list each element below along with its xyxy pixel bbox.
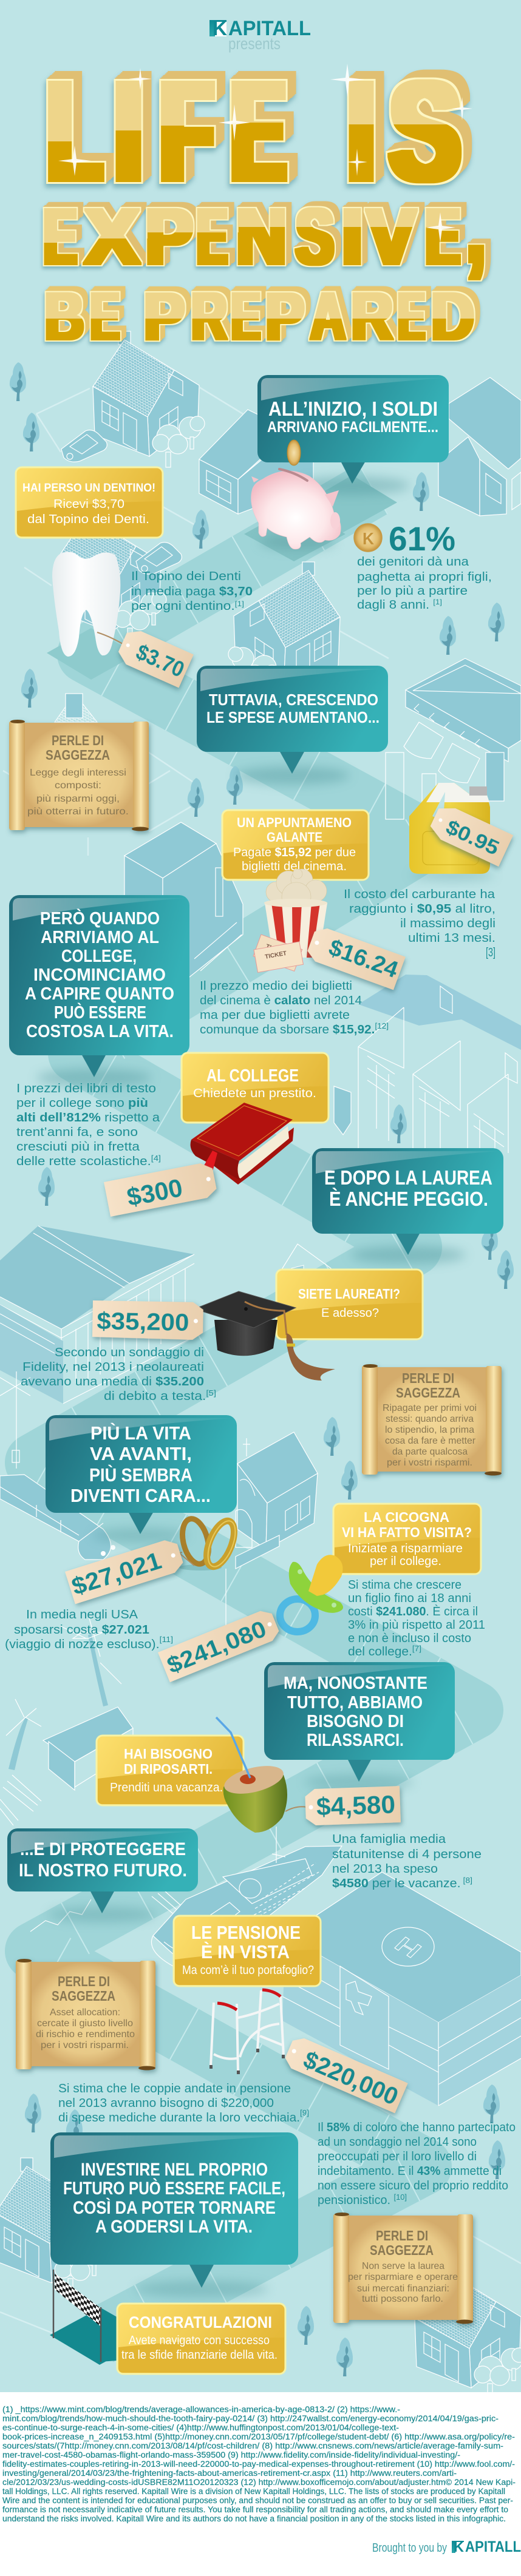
student debt text: [21, 1346, 216, 1403]
scroll 3: perle di saggezza: Asset allocation:: [50, 2007, 120, 2018]
bubble 4: dopo la laurea: [312, 1148, 503, 1264]
scroll 4: perle di saggezza: tutti possono farlo.: [362, 2294, 443, 2304]
bubble 3: college: INCOMINCIAMO: [33, 965, 166, 985]
textbooks text: [4]: [151, 1154, 161, 1163]
price tag: $16.24: [305, 925, 406, 990]
scroll 4: perle di saggezza: [333, 2213, 473, 2324]
child cost text: Si stima che crescere: [348, 1578, 461, 1592]
price tag: $35,200: [92, 1300, 203, 1340]
stat: 61% allowance: [1]: [433, 598, 442, 606]
scroll 4: perle di saggezza: sui mercati finanziari:: [357, 2284, 449, 2294]
title: be prepared: P: [265, 279, 304, 354]
price tag: $16.24: $16.24: [325, 935, 401, 983]
footnotes and legal text: cle/2012/03/23/us-wedding-costs-idUSBRE82M11O20120323 (12) http://www.boxofficemojo.com/about/adjuster.htm© 2014 New Kapi-: [2, 2478, 516, 2487]
stat: 61% allowance: [354, 519, 492, 612]
yellow box: al college: AL COLLEGE: [206, 1066, 299, 1086]
scroll 4: perle di saggezza: per risparmiare e operare: [348, 2272, 458, 2282]
houses by the finish line: [0, 2158, 521, 2399]
bubble 1: all'inizio: ALL’INIZIO, I SOLDI: [268, 397, 438, 420]
medical expense text: nel 2013 avranno bisogno di $220,000: [58, 2097, 274, 2110]
bubble 5: più la vita va avanti: PIÙ SEMBRA: [89, 1464, 192, 1486]
title: expensive: ,: [466, 164, 486, 286]
survey text: Il 58% di coloro che hanno partecipato: [318, 2121, 516, 2134]
house and fence behind the tooth box: [24, 507, 200, 643]
scroll 4: perle di saggezza: PERLE DI: [376, 2228, 428, 2243]
yellow box: hai perso un dentino: [16, 467, 163, 538]
yellow box: la cicogna: LA CICOGNA: [364, 1509, 449, 1525]
price tag: $4,580: $4,580: [316, 1790, 396, 1821]
footnotes and legal text: (1) _https://www.mint.com/blog/trends/average-allowances-in-america-by-age-0813-2/ (2) https://www.-: [2, 2405, 400, 2414]
scroll 1: perle di saggezza: composti:: [55, 780, 101, 791]
tooth fairy text: per ogni dentino.: [131, 600, 222, 613]
footnotes and legal text: fidelity-estimates-couples-retiring-in-2013-will-need-220000-to-pay-medical-expenses-throughout-retirement (10) http://www.fool.com/-: [2, 2459, 515, 2469]
student debt text: di debito a testa.: [104, 1390, 193, 1403]
yellow box: siete laureati: E adesso?: [321, 1307, 379, 1320]
icon: wedding rings: [167, 1516, 241, 1570]
icon: tooth: [52, 552, 129, 657]
title sparkles: [58, 64, 472, 243]
bubble 5: più la vita va avanti: [46, 1415, 237, 1543]
icon: coconut with straw: [216, 1717, 307, 1833]
cinema text: ma per due biglietti avrete: [200, 1009, 350, 1022]
yellow box: appuntamento: GALANTE: [267, 830, 322, 845]
title: Life is: L: [47, 52, 101, 211]
bubble 3: college: [9, 895, 189, 1087]
tooth fairy text: [131, 570, 253, 613]
title: be prepared: R: [191, 279, 227, 354]
title: expensive: V: [367, 192, 415, 281]
title: be prepared: E: [398, 279, 425, 354]
student debt text: Fidelity, nel 2013 i neolaureati: [22, 1361, 204, 1374]
scroll 1: perle di saggezza: [9, 720, 149, 831]
scroll 2: perle di saggezza: per i vostri risparmi.: [387, 1458, 472, 1468]
brought to you by credit with logo: [372, 2538, 521, 2555]
wedding text: (viaggio di nozze escluso).: [5, 1638, 148, 1651]
house under the dentist text: [228, 562, 389, 698]
textbooks text: [16, 1082, 161, 1168]
price tag: $27,021: [65, 1537, 185, 1604]
price tag: $241,080: [158, 1607, 281, 1682]
brought to you by credit with logo: K: [454, 2539, 465, 2555]
yellow box: la cicogna: [333, 1504, 481, 1574]
bubble 3: college: PUÒ ESSERE: [54, 1002, 146, 1023]
child cost text: e non è incluso il costo: [348, 1632, 471, 1645]
icon: jerry can: [409, 783, 495, 880]
footnotes and legal text: [2, 2405, 516, 2523]
bubble 1: all'inizio: ARRIVANO FACILMENTE...: [267, 419, 438, 436]
title: expensive: [44, 164, 486, 286]
finish line flag and tile: [50, 2270, 152, 2365]
long house left of the first bubble: [199, 410, 313, 514]
yellow box: appuntamento: UN APPUNTAMENO: [237, 815, 352, 830]
yellow box: appuntamento: Pagate $15,92 per due: [233, 846, 356, 859]
textbooks text: alti dell’812% rispetto a: [16, 1111, 160, 1124]
bubble 5: più la vita va avanti: VA AVANTI,: [90, 1443, 192, 1464]
yellow box: le pensione: È IN VISTA: [201, 1941, 290, 1962]
title: Life is: F: [161, 52, 213, 211]
yellow box: hai bisogno di riposarti: Prenditi una vacanza.: [110, 1781, 223, 1794]
price tag: $4,580: [305, 1786, 401, 1826]
textbooks text: cresciuti più in fretta: [16, 1140, 140, 1154]
bubble 3: college: PERÒ QUANDO: [40, 908, 160, 928]
stat: 61% allowance: dei genitori dà una: [357, 555, 469, 569]
survey text: [318, 2121, 516, 2207]
scroll 4: perle di saggezza: Non serve la laurea: [362, 2261, 444, 2271]
bubble 8: investire: COSÌ DA POTER TORNARE: [73, 2197, 276, 2218]
child cost text: del college.: [348, 1645, 409, 1658]
footnotes and legal text: mint.com/blog/trends/how-much-should-the-tooth-fairy-pay-0214/ (3) http://247wallst.com/energy-economy/2014/04/19/gas-pric-: [2, 2414, 499, 2423]
medical expense text: Si stima che le coppie andate in pensione: [58, 2082, 291, 2095]
vacation text: [8]: [461, 1876, 472, 1885]
footnotes and legal text: tall Holdings, LLC. All rights reserved. Kapitall Wire is a division of New Kapitall Holdings, LLC. The lists of stocks are produced by Kapitall: [2, 2487, 505, 2496]
bubble 5: più la vita va avanti: PIÙ LA VITA: [90, 1422, 191, 1444]
bubble 1: all'inizio: [257, 375, 449, 495]
icon: pacifier: [280, 1555, 343, 1632]
bubble 2: tuttavia: TUTTAVIA, CRESCENDO: [209, 691, 378, 709]
title: be prepared: R: [351, 279, 393, 354]
cinema building: [118, 822, 243, 977]
yellow box: congratulazioni: CONGRATULAZIONI: [129, 2313, 272, 2331]
yellow box: le pensione: [174, 1916, 321, 1986]
survey text: indebitamento. E il 43% ammette di: [318, 2165, 502, 2178]
footnotes and legal text: formance is not necessarily indicative of future results. You take full responsibility for all trading actions, and should make every effort to: [2, 2505, 508, 2514]
scroll 2: perle di saggezza: [362, 1364, 502, 1476]
footnotes and legal text: Wire and the content is intended for educational purposes only, and should not be construed as an offer to buy or sell securities. Past per-: [2, 2496, 513, 2505]
wedding text: [11]: [160, 1635, 173, 1644]
presents label: presents: [228, 35, 281, 53]
stat: 61% allowance: dagli 8 anni.: [357, 598, 423, 612]
survey text: non essere sicuro del proprio reddito: [318, 2179, 508, 2192]
scroll 3: perle di saggezza: di rischio e rendimento: [36, 2029, 135, 2040]
long house right of the first bubble: [438, 377, 521, 516]
price tag: $3.70: $3.70: [132, 639, 188, 682]
scroll 1: perle di saggezza: più otterrai in futuro.: [27, 806, 129, 817]
palm trees and beach hut: [0, 1614, 194, 1932]
wedding text: In media negli USA: [26, 1608, 138, 1621]
title: be prepared: D: [431, 279, 474, 354]
scroll 3: perle di saggezza: [16, 1959, 155, 2071]
house: top left: [36, 331, 243, 467]
scroll 2: perle di saggezza: PERLE DI: [402, 1370, 454, 1386]
yellow box: al college: Chiedete un prestito.: [193, 1087, 316, 1100]
tooth fairy text: Il Topino dei Denti: [131, 570, 241, 583]
price tag: $0.95: $0.95: [443, 816, 503, 859]
footnotes and legal text: investing/general/2014/03/23/the-frightening-facts-about-americas-retirement-cr.aspx (11) http://www.reuters.com/arti-: [2, 2469, 457, 2478]
medical expense text: [58, 2082, 309, 2125]
cinema text: del cinema è calato nel 2014: [200, 994, 362, 1007]
title: expensive: X: [85, 192, 140, 281]
title: expensive: N: [236, 192, 287, 281]
medical expense text: [9]: [300, 2108, 309, 2117]
stat: 61% allowance: per lo più a partire: [357, 584, 468, 598]
church: [226, 1432, 318, 1651]
bubble 5: più la vita va avanti: DIVENTI CARA...: [70, 1485, 211, 1506]
scroll 3: perle di saggezza: per i vostri risparmi.: [41, 2040, 129, 2050]
brought to you by credit with logo: Brought to you by: [372, 2541, 447, 2555]
title: Life is: I: [114, 52, 143, 211]
title: expensive: E: [197, 192, 227, 281]
icon: red book: [191, 1103, 294, 1185]
isometric road winding down the page: [34, 475, 474, 2336]
stat: 61% allowance: K: [363, 529, 374, 548]
bubble 4: dopo la laurea: E DOPO LA LAUREA: [324, 1166, 492, 1189]
icon: popcorn bucket and tickets: TICKET: [264, 950, 287, 961]
price tag: $220,000: [282, 2035, 408, 2113]
title: Life is: E: [231, 52, 285, 211]
survey text: ad un sondaggio nel 2014 sono: [318, 2135, 477, 2149]
fence and roof around first scroll: [3, 694, 200, 856]
footnotes and legal text: understand the risks involved. Kapitall Wire and its authors do not have a financial position in any of the stocks listed in this infographic.: [2, 2514, 506, 2523]
gas station: [386, 658, 521, 825]
scroll 3: perle di saggezza: cercate il giusto livello: [37, 2018, 133, 2029]
yellow box: hai perso un dentino: Ricevi $3,70: [53, 498, 124, 511]
tooth fairy text: [1]: [235, 600, 244, 608]
bubble 2: tuttavia: LE SPESE AUMENTANO...: [206, 708, 380, 726]
scroll 2: perle di saggezza: stessi: quando arriva: [386, 1414, 474, 1424]
textbooks text: per il college sono più: [16, 1097, 148, 1110]
trees: [10, 362, 514, 2376]
child cost text: 3% in più rispetto al 2011: [348, 1618, 485, 1632]
title: expensive: P: [146, 192, 193, 281]
yellow box: al college: [182, 1053, 329, 1123]
scroll 2: perle di saggezza: SAGGEZZA: [396, 1385, 460, 1401]
title: Life is: I: [348, 52, 375, 211]
bank building with columns: [0, 1226, 197, 1469]
stat: 61% allowance: paghetta ai propri figli,: [357, 570, 492, 584]
yellow box: la cicogna: VI HA FATTO VISITA?: [342, 1524, 472, 1540]
yellow box: appuntamento: biglietti del cinema.: [242, 860, 347, 873]
vacation text: Una famiglia media: [332, 1833, 446, 1846]
bubble 3: college: COSTOSA LA VITA.: [26, 1022, 174, 1041]
scroll 1: perle di saggezza: Legge degli interessi: [30, 768, 126, 778]
scroll 1: perle di saggezza: più risparmi oggi,: [36, 794, 120, 804]
title: expensive: I: [341, 192, 363, 281]
vacation text: statunitense di 4 persone: [332, 1848, 482, 1861]
title: be prepared: [45, 279, 474, 354]
scroll 2: perle di saggezza: cosa da fare è metter: [385, 1436, 476, 1446]
bubble 7: proteggere il futuro: IL NOSTRO FUTURO.: [19, 1861, 187, 1881]
title: Life is: S: [390, 52, 460, 211]
yellow box: congratulazioni: tra le sfide finanziarie della vita.: [121, 2348, 278, 2362]
yellow box: siete laureati: SIETE LAUREATI?: [298, 1286, 400, 1302]
gas cost text: ultimi 13 mesi.: [408, 931, 495, 945]
wedding text: [5, 1608, 173, 1651]
bubble 8: investire: INVESTIRE NEL PROPRIO: [81, 2160, 268, 2180]
limousine: [0, 1475, 115, 1560]
price tag: $27,021: $27,021: [69, 1547, 165, 1600]
price tag: $0.95: [427, 802, 513, 867]
title: expensive: E: [426, 192, 460, 281]
footer white area: [0, 2392, 521, 2576]
bubble 8: investire: FUTURO PUÒ ESSERE FACILE,: [63, 2178, 285, 2199]
stat: 61% allowance: 61%: [389, 519, 455, 558]
textbooks text: trent’anni fa, e sono: [16, 1126, 138, 1139]
bubble 2: tuttavia: [197, 666, 388, 785]
icon: popcorn bucket and tickets: TICKET: [265, 943, 288, 957]
bubble 3: college: A CAPIRE QUANTO: [25, 984, 174, 1004]
yellow box: congratulazioni: [117, 2304, 285, 2374]
bubble 6: rilassarci: MA, NONOSTANTE: [284, 1674, 427, 1693]
bubble 6: rilassarci: TUTTO, ABBIAMO: [287, 1693, 423, 1712]
survey text: [10]: [394, 2192, 407, 2202]
scroll 2: perle di saggezza: da parte qualcosa: [392, 1447, 468, 1457]
survey text: preoccupati per il loro livello di: [318, 2150, 477, 2163]
logo: Kapitall: K: [213, 17, 227, 39]
price tag: $300: $300: [124, 1173, 185, 1212]
vacation text: $4580 per le vacanze.: [332, 1877, 454, 1890]
price tag: $35,200: $35,200: [97, 1308, 189, 1336]
child cost text: un figlio fino ai 18 anni: [348, 1592, 471, 1605]
vacation text: nel 2013 ha speso: [332, 1862, 438, 1876]
textbooks text: delle rette scolastiche.: [16, 1155, 137, 1168]
gas cost text: raggiunto i $0,95 al litro,: [349, 902, 495, 916]
vacation text: [332, 1833, 482, 1890]
title: expensive: E: [44, 192, 77, 281]
small building behind the last bubble: [281, 1244, 331, 1305]
medical expense text: di spese mediche durante la loro vecchiaia.: [58, 2111, 291, 2125]
gas cost text: [3]: [486, 946, 495, 959]
title: Life is: [47, 52, 460, 211]
price tag: $220,000: $220,000: [299, 2046, 402, 2111]
gas cost text: Il costo del carburante ha: [344, 888, 495, 901]
bubble 6: rilassarci: [264, 1662, 455, 1790]
yellow box: hai bisogno di riposarti: [97, 1736, 243, 1805]
title: be prepared: E: [231, 279, 260, 354]
cinema text: Il prezzo medio dei biglietti: [200, 979, 352, 993]
yellow box: siete laureati: [276, 1269, 423, 1339]
scroll 2: perle di saggezza: lo stipendio, la prima: [385, 1425, 474, 1435]
wedding text: sposarsi costa $27.021: [14, 1623, 149, 1637]
bubble 3: college: ARRIVIAMO AL: [41, 928, 159, 947]
scroll 3: perle di saggezza: PERLE DI: [58, 1973, 110, 1989]
child cost text: [7]: [412, 1644, 421, 1653]
bubble 7: proteggere il futuro: [7, 1828, 198, 1922]
yellow box: hai perso un dentino: HAI PERSO UN DENTINO!: [22, 482, 155, 495]
cinema text: comunque da sborsare $15,92.: [200, 1023, 373, 1036]
piggy bank with coin: [251, 440, 341, 549]
student debt text: [5]: [206, 1388, 216, 1398]
bubble 3: college: COLLEGE,: [61, 947, 137, 966]
yellow box: le pensione: Ma com’è il tuo portafoglio?: [182, 1964, 314, 1977]
yellow box: congratulazioni: Avete navigato con successo: [129, 2334, 270, 2347]
title: be prepared: A: [310, 279, 346, 354]
yellow box: hai bisogno di riposarti: DI RIPOSARTI.: [124, 1761, 213, 1777]
cruise ship: [151, 1827, 342, 1969]
cinema text: [200, 979, 389, 1036]
bubble 8: investire: A GODERSI LA VITA.: [95, 2217, 253, 2237]
scroll 1: perle di saggezza: SAGGEZZA: [46, 747, 110, 763]
yellow box: la cicogna: per il college.: [370, 1555, 441, 1568]
logo: Kapitall: APITALL: [228, 17, 311, 40]
price tag: $241,080: $241,080: [163, 1616, 270, 1679]
price tag: $300: [104, 1161, 218, 1217]
gas cost text: [344, 888, 495, 959]
textbooks text: I prezzi dei libri di testo: [16, 1082, 156, 1095]
bubble 8: investire: [50, 2132, 298, 2297]
icon: graduation cap: [194, 1291, 335, 1381]
icon: popcorn bucket and tickets: [253, 869, 327, 972]
scroll 3: perle di saggezza: SAGGEZZA: [52, 1988, 115, 2004]
footnotes and legal text: sources/stats/(7http://money.cnn.com/2013/08/14/pf/cost-children/ (8) http://www.cnsnews.com/news/article/average-family-sum-: [2, 2441, 503, 2450]
yellow box: hai bisogno di riposarti: HAI BISOGNO: [124, 1746, 213, 1762]
tooth fairy text: in media paga $3,70: [131, 585, 253, 598]
yellow box: le pensione: LE PENSIONE: [191, 1922, 301, 1943]
college campus: [334, 975, 521, 1153]
title: be prepared: E: [90, 279, 120, 354]
icon: walker: [209, 1990, 285, 2074]
yellow box: hai perso un dentino: dal Topino dei Denti.: [27, 513, 149, 526]
student debt text: Secondo un sondaggio di: [55, 1346, 204, 1359]
student debt text: avevano una media di $35.200: [21, 1375, 204, 1388]
yellow box: appuntamento: [222, 810, 369, 880]
scroll 1: perle di saggezza: PERLE DI: [52, 732, 104, 748]
yellow box: la cicogna: Iniziate a risparmiare: [348, 1542, 463, 1555]
title: expensive: S: [296, 192, 334, 281]
price tag: $3.70: [115, 626, 194, 688]
child cost text: [348, 1578, 485, 1658]
child cost text: costi $241.080. È circa il: [348, 1604, 478, 1618]
bubble 6: rilassarci: RILASSARCI.: [307, 1731, 404, 1750]
scroll 4: perle di saggezza: SAGGEZZA: [370, 2242, 434, 2258]
bubble 4: dopo la laurea: È ANCHE PEGGIO.: [329, 1188, 488, 1210]
footnotes and legal text: book-prices-increase_n_2409153.html (5)http://money.cnn.com/2013/05/17/pf/college/student-debt/ (6) http://www.asa.org/policy/re-: [2, 2432, 515, 2441]
footnotes and legal text: mer-travel-cost-4580-obamas-flight-orlando-mass-359500 (9) http://www.fidelity.com/inside-fidelity/individual-investing/-: [2, 2450, 460, 2459]
bubble 7: proteggere il futuro: ...E DI PROTEGGERE: [20, 1839, 186, 1859]
cinema text: [12]: [375, 1021, 389, 1030]
hospital: [282, 1872, 521, 2106]
title: be prepared: B: [45, 279, 84, 354]
footnotes and legal text: es-continue-to-surge-reach-4-in-some-cities/ (4)http://www.huffingtonpost.com/2013/01/04/college-text-: [2, 2423, 399, 2432]
title: be prepared: P: [144, 279, 185, 354]
survey text: pensionistico.: [318, 2194, 391, 2207]
scroll 2: perle di saggezza: Ripagate per primi voi: [383, 1403, 477, 1413]
gas cost text: il massimo degli: [400, 917, 495, 930]
bubble 6: rilassarci: BISOGNO DI: [307, 1712, 404, 1731]
